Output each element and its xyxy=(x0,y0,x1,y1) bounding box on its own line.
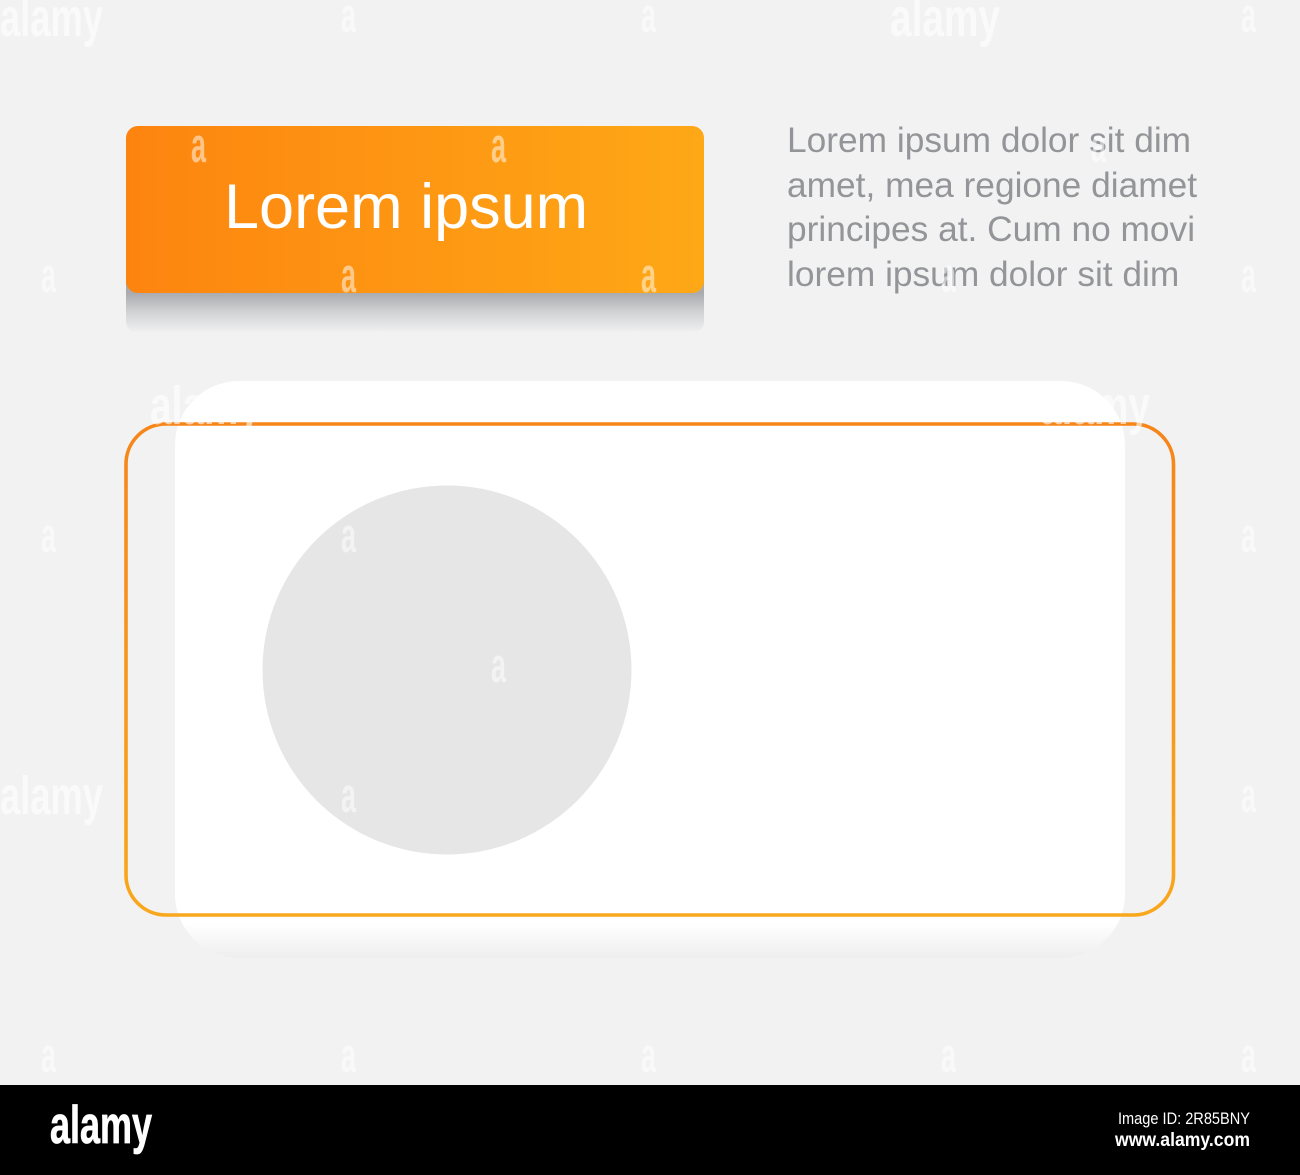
watermark marks: a xyxy=(341,509,356,563)
watermark marks: a xyxy=(941,249,956,303)
watermark marks: a xyxy=(491,639,506,693)
watermark marks: alamy xyxy=(150,376,260,436)
watermark marks: a xyxy=(341,1029,356,1083)
watermark marks: a xyxy=(1241,249,1256,303)
footer logo: alamy xyxy=(50,1096,152,1155)
watermark marks: a xyxy=(641,249,656,303)
footer url: www.alamy.com xyxy=(1114,1130,1250,1151)
body text block: amet, mea regione diamet xyxy=(787,166,1197,205)
watermark marks: a xyxy=(641,1029,656,1083)
watermark marks: a xyxy=(41,249,56,303)
watermark marks: a xyxy=(1091,119,1106,173)
body text block: principes at. Cum no movi xyxy=(787,210,1195,249)
body text block xyxy=(787,121,1197,294)
title text: Lorem ipsum xyxy=(224,172,588,242)
watermark marks: alamy xyxy=(0,766,103,826)
panel: white card xyxy=(175,381,1125,958)
watermark marks: a xyxy=(941,1029,956,1083)
title banner xyxy=(126,126,704,293)
watermark marks: a xyxy=(1241,1029,1256,1083)
grey circle placeholder xyxy=(262,486,632,854)
watermark marks: alamy xyxy=(1040,376,1150,436)
watermark marks: a xyxy=(41,1029,56,1083)
watermark marks: a xyxy=(491,119,506,173)
body text block: lorem ipsum dolor sit dim xyxy=(787,255,1179,294)
footer bar xyxy=(0,1085,1300,1175)
watermark marks: a xyxy=(341,249,356,303)
watermark marks: a xyxy=(1241,769,1256,823)
watermark marks: a xyxy=(1241,509,1256,563)
watermark marks: a xyxy=(341,769,356,823)
watermark marks: a xyxy=(191,119,206,173)
button shadow xyxy=(126,270,704,332)
footer image id: Image ID: 2R85BNY xyxy=(1118,1109,1250,1128)
body text block: Lorem ipsum dolor sit dim xyxy=(787,121,1191,160)
watermark marks: a xyxy=(41,509,56,563)
panel: orange outline xyxy=(126,424,1174,915)
